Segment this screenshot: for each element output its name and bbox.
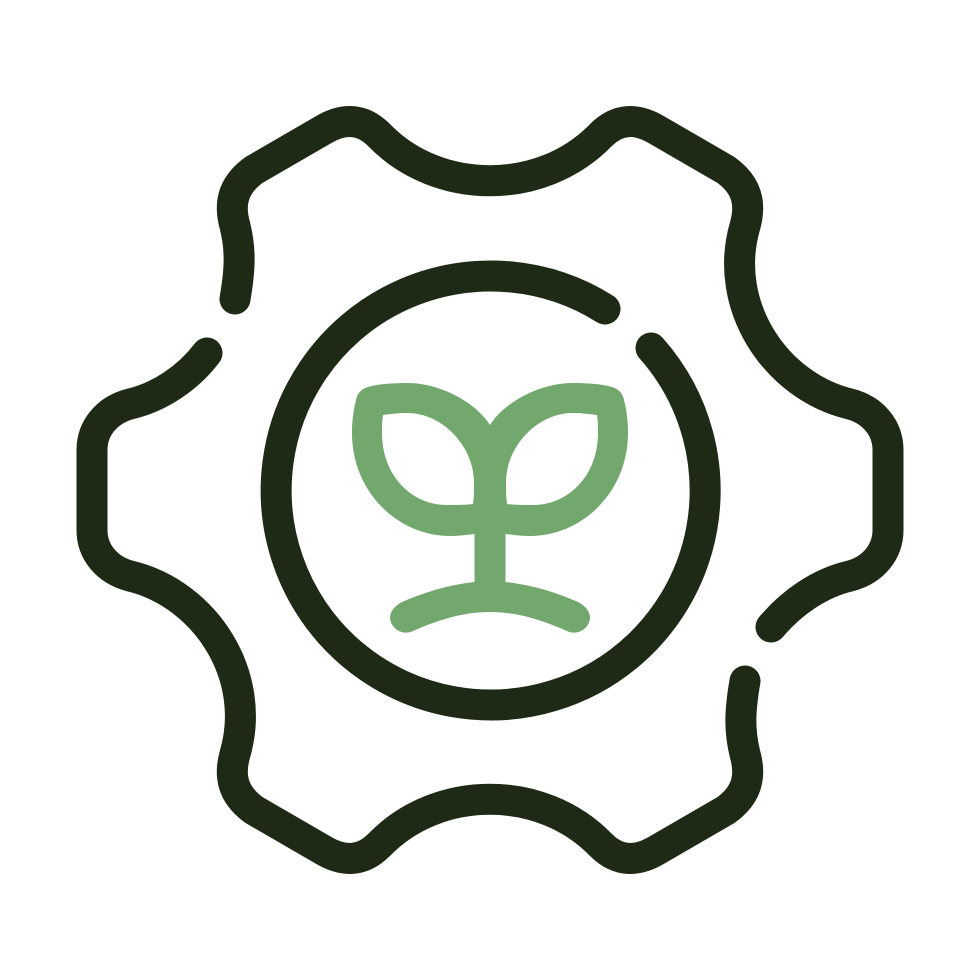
- gear outline: lower segment: [92, 353, 748, 858]
- icon: seedling: [352, 383, 628, 633]
- gear outline: upper segment: [232, 122, 888, 627]
- inner ring: [276, 276, 705, 705]
